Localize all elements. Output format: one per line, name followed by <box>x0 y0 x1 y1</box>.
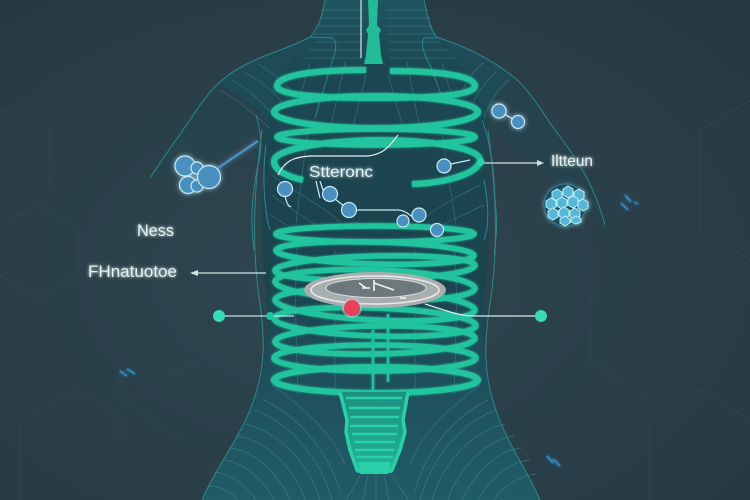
shoulder caps <box>218 36 515 125</box>
callout line: left dot <box>213 310 294 322</box>
torso contours <box>296 62 456 225</box>
callout arrow: right label <box>478 158 544 166</box>
callout line: right dot <box>425 304 547 322</box>
funnel <box>340 392 408 474</box>
disk glyph <box>359 280 406 298</box>
torso <box>202 0 540 500</box>
molecule: left cluster <box>175 141 258 194</box>
molecule: hexagon cluster <box>544 184 588 226</box>
small blue marks: lower left <box>120 369 135 376</box>
molecule: right of coil <box>437 159 451 173</box>
label: center: Stteronc <box>309 164 373 181</box>
callout curve to center label <box>278 135 398 175</box>
neck stem <box>361 0 383 64</box>
human body silhouette <box>150 0 605 500</box>
label: left upper: Ness <box>137 222 174 240</box>
central disk <box>304 272 446 308</box>
label: right: Iltteun <box>551 153 593 170</box>
small blue marks: upper right <box>621 195 638 210</box>
callout arrow: left label <box>190 270 266 276</box>
lower contours <box>208 385 345 500</box>
body contour lines <box>208 10 536 500</box>
red marker <box>342 298 362 318</box>
arms and shoulders <box>150 35 605 240</box>
hexagon background pattern <box>0 100 750 500</box>
lower ring coil <box>274 226 478 400</box>
small blue marks: lower right <box>547 456 560 466</box>
neck white line <box>360 0 362 58</box>
molecule: upper right <box>492 104 524 128</box>
molecule chain: center <box>278 159 470 236</box>
shoulder and arm outlines <box>150 0 605 500</box>
upper ring coil <box>274 70 480 184</box>
label: left lower: FHnatuotoe <box>88 263 177 281</box>
